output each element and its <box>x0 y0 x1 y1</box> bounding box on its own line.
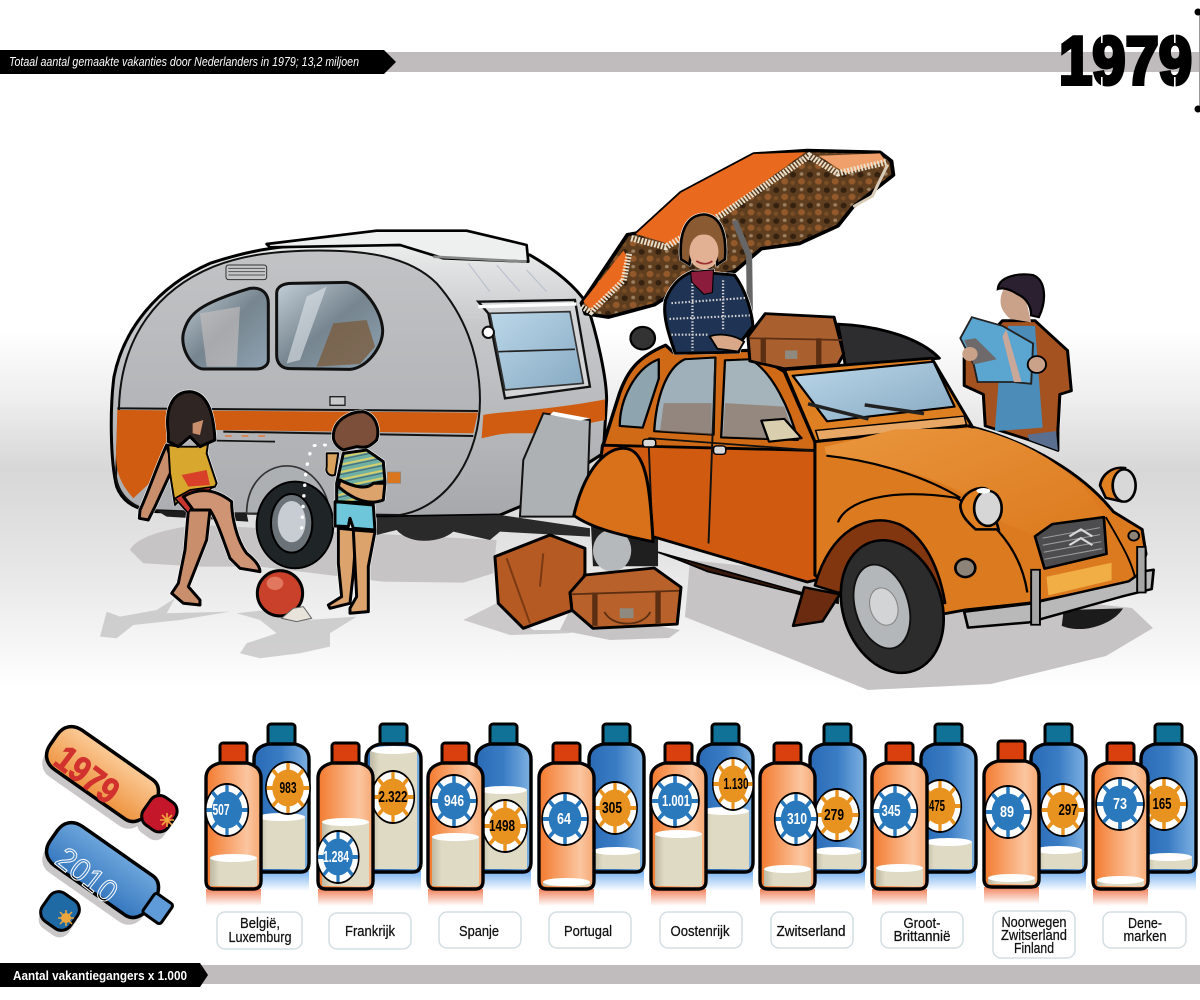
country: Frankrijk <box>317 724 421 949</box>
country: Noorwegen, Zwitserland, Finland: 89 <box>1000 804 1014 821</box>
country: Spanje <box>428 724 531 948</box>
windshield <box>793 362 955 421</box>
country: Frankrijk: Frankrijk <box>345 923 395 940</box>
legend bottle 1979: 1979 <box>47 737 128 812</box>
orange Citroen 2CV <box>574 324 1154 683</box>
boy with ice cream <box>302 412 385 613</box>
upper body <box>603 345 821 491</box>
bottom bar: number of holidaymakers: Aantal vakantiegangers x 1.000 <box>13 968 187 983</box>
bonnet and front wing <box>815 426 1146 614</box>
country: Groot-Brittannie <box>872 724 976 948</box>
country: Denemarken: 73 <box>1113 796 1127 813</box>
country: Spanje: Spanje <box>459 923 499 940</box>
suitcases on ground <box>495 535 681 628</box>
doors panel <box>593 445 823 582</box>
country: Oostenrijk: Oostenrijk <box>670 923 730 940</box>
legend bottle 1979 <box>36 720 185 850</box>
ground shadows <box>100 525 1153 690</box>
country: Frankrijk: 2.322 <box>378 789 408 806</box>
caravan <box>111 231 607 568</box>
country: Belgie, Luxemburg: 507 <box>212 802 230 819</box>
man with map <box>960 274 1071 450</box>
legend bottle 2010: 2010 <box>49 840 125 910</box>
chassis <box>377 515 590 541</box>
country: Noorwegen, Zwitserland, Finland <box>984 724 1086 958</box>
front window <box>478 300 590 398</box>
front wheel <box>826 530 958 683</box>
roof vent <box>226 265 267 280</box>
sill and mud flap <box>658 552 838 603</box>
orange stripe <box>116 399 605 498</box>
wheel arch <box>815 520 945 603</box>
country: Portugal: 64 <box>557 811 571 828</box>
rear windows <box>183 288 268 369</box>
country: Portugal: 305 <box>602 800 622 817</box>
country: Zwitserland: Zwitserland <box>776 923 846 940</box>
country: Belgie, Luxemburg: 983 <box>280 780 297 797</box>
country: Groot-Brittannie: Groot- <box>904 915 940 932</box>
country: Belgie, Luxemburg: Luxemburg <box>228 929 292 946</box>
country: Denemarken: 165 <box>1152 796 1172 813</box>
rear fender <box>574 448 653 542</box>
far side wheel <box>1062 608 1123 629</box>
ball and dropped ice <box>257 571 312 622</box>
wheel arch <box>247 466 330 513</box>
top bar: total holidays <box>0 50 1200 74</box>
number plate <box>1046 563 1112 595</box>
country: Oostenrijk <box>651 724 753 948</box>
country: Denemarken: marken <box>1124 928 1166 945</box>
loose cap <box>34 887 84 942</box>
country: Portugal: Portugal <box>564 923 612 940</box>
country: Groot-Brittannie: 475 <box>929 798 945 815</box>
country: Oostenrijk: 1.130 <box>724 776 749 793</box>
legend bottles 1979 and 2010 <box>34 720 185 942</box>
bumper <box>964 570 1154 628</box>
girl in swimsuit <box>139 392 260 605</box>
country: Frankrijk: 1.284 <box>323 849 349 866</box>
top bar: total holidays: Totaal aantal gemaakte vakanties door Nederlanders in 1979; 13,2 miljoen <box>9 54 359 69</box>
country: Groot-Brittannie: Brittannië <box>894 928 950 945</box>
suitcase on roof <box>748 314 844 369</box>
country: Noorwegen, Zwitserland, Finland: Noorwegen <box>1002 914 1066 931</box>
country: Oostenrijk: 1.001 <box>662 793 690 810</box>
gas box <box>520 413 590 517</box>
rear wheel of car <box>591 327 658 571</box>
roof hatch <box>267 231 528 262</box>
country: Noorwegen, Zwitserland, Finland: Zwitserland <box>1001 927 1067 944</box>
country: Denemarken: Dene- <box>1128 915 1162 932</box>
country: Spanje: 1498 <box>489 818 515 835</box>
country: Noorwegen, Zwitserland, Finland: Finland <box>1014 940 1054 957</box>
caravan wheel <box>257 482 333 568</box>
parasol <box>581 151 893 317</box>
country: Noorwegen, Zwitserland, Finland: 297 <box>1058 802 1078 819</box>
soft top <box>838 324 939 366</box>
caravan side panel <box>116 251 480 515</box>
country: Belgie, Luxemburg <box>206 724 310 949</box>
headlights <box>960 488 999 529</box>
grille <box>1035 517 1107 569</box>
side windows <box>620 359 659 428</box>
country: Spanje: 946 <box>444 793 464 810</box>
legend bottle 2010 <box>36 816 181 935</box>
bottom bar: number of holidaymakers <box>0 963 1200 987</box>
country: Zwitserland <box>760 724 865 948</box>
country: Belgie, Luxemburg: België, <box>240 915 280 932</box>
country: Zwitserland: 310 <box>787 811 807 828</box>
door handle <box>330 397 345 405</box>
country: Denemarken <box>1093 724 1196 948</box>
woman in sunroof <box>665 214 753 353</box>
country: Groot-Brittannie: 345 <box>882 803 901 820</box>
door mirror <box>761 419 802 442</box>
country: Zwitserland: 279 <box>824 807 844 824</box>
country: Portugal <box>539 724 644 948</box>
